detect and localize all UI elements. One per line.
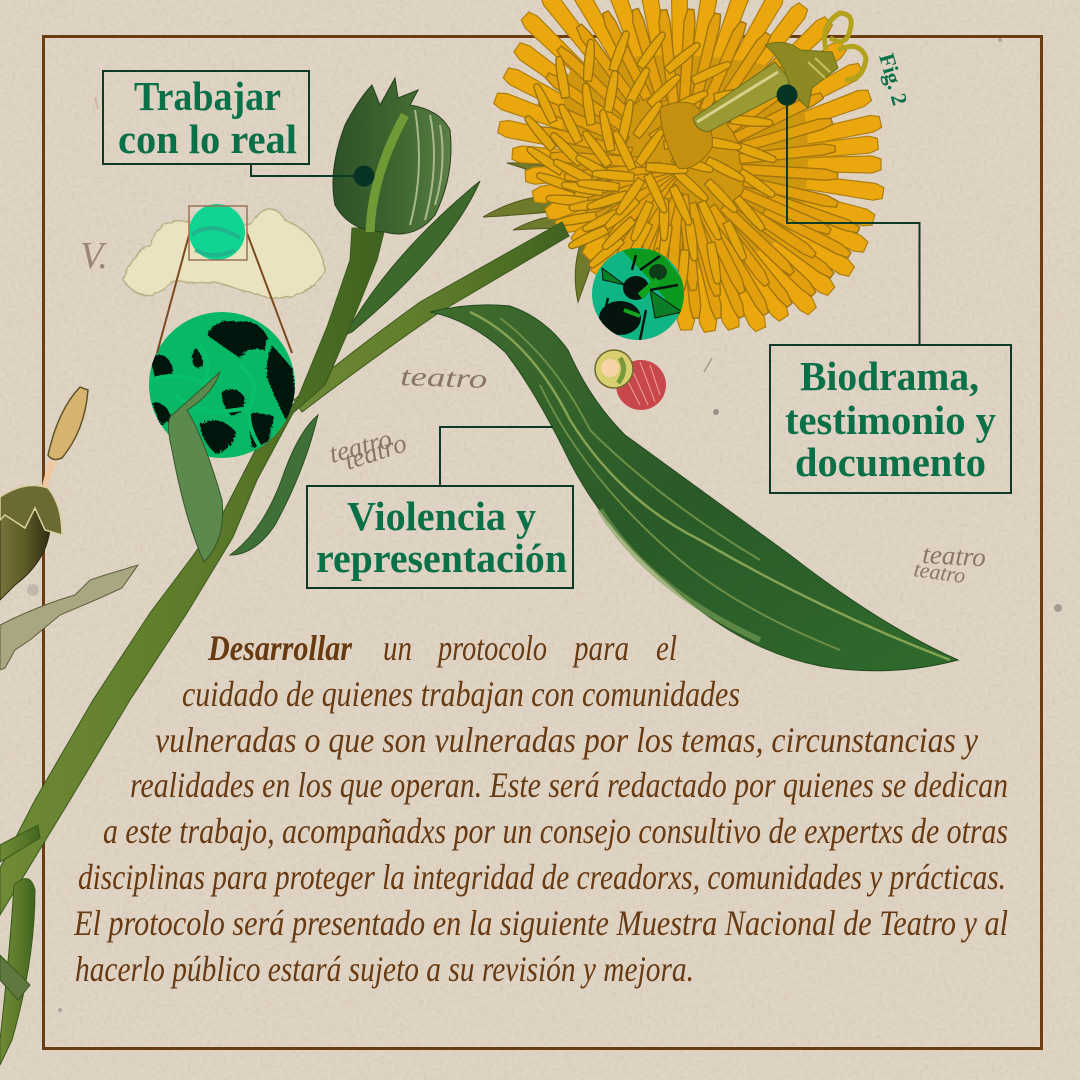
coral specimen bbox=[123, 204, 325, 353]
flower sepals bbox=[483, 163, 598, 302]
red and yellow circles bbox=[595, 350, 666, 410]
left seed head bbox=[0, 387, 138, 670]
body paragraph: vulneradas o que son vulneradas por los temas, circunstancias y bbox=[155, 720, 978, 760]
label: Trabajar con lo real: con lo real bbox=[118, 116, 297, 162]
teatro watermark right: teatro bbox=[922, 539, 987, 572]
body paragraph bbox=[73, 628, 1008, 989]
body paragraph: hacerlo público estará sujeto a su revisión y mejora. bbox=[75, 949, 694, 989]
seed capsule bbox=[0, 510, 51, 600]
teatro watermark: teatro bbox=[400, 361, 488, 394]
V. mark: V. bbox=[80, 235, 108, 277]
label: Biodrama, testimonio y documento: documento bbox=[795, 439, 986, 485]
body paragraph: cuidado de quienes trabajan con comunidades bbox=[182, 674, 740, 714]
label: Trabajar con lo real bbox=[103, 71, 309, 164]
connector: Violencia bbox=[440, 427, 553, 486]
lower branches bbox=[0, 825, 40, 1065]
slim leaf bbox=[345, 181, 480, 335]
small curled leaf bbox=[168, 372, 223, 562]
figure label: Fig. 2 bbox=[874, 50, 913, 108]
connector: Biodrama bbox=[776, 84, 920, 345]
small leaf right bbox=[230, 415, 318, 555]
teatro watermark double: teatro bbox=[326, 423, 395, 469]
body paragraph: protocolo bbox=[436, 628, 547, 668]
connector: Trabajar con lo real bbox=[251, 164, 374, 186]
label: Violencia y representación bbox=[307, 486, 573, 588]
big leaf bbox=[430, 305, 958, 671]
coral highlighted circle bbox=[189, 204, 247, 260]
label: Biodrama, testimonio y documento bbox=[770, 345, 1011, 493]
teatro watermark double: teatro bbox=[341, 428, 410, 476]
flower backing bbox=[562, 55, 808, 270]
label: Violencia y representación: representación bbox=[316, 535, 567, 581]
serrated leaf bbox=[0, 565, 138, 670]
teatro watermark right: teatro bbox=[912, 556, 967, 588]
bud bbox=[333, 78, 451, 234]
body paragraph: Desarrollar bbox=[207, 628, 353, 668]
label: Biodrama, testimonio y documento: Biodrama, bbox=[800, 353, 979, 399]
body paragraph: el bbox=[656, 628, 677, 668]
body paragraph: para bbox=[572, 628, 629, 668]
body paragraph: un bbox=[383, 628, 412, 668]
zoom lines bbox=[157, 233, 292, 353]
label: Violencia y representación: Violencia y bbox=[347, 493, 536, 539]
magnified coral circle bbox=[149, 312, 298, 458]
label: Trabajar con lo real: Trabajar bbox=[134, 73, 281, 119]
flower corolla cup bbox=[660, 102, 712, 169]
stamen bbox=[42, 387, 88, 487]
bee circle bbox=[592, 248, 690, 340]
flower bbox=[483, 0, 884, 333]
inner swirl florets bbox=[522, 29, 778, 292]
teatro watermark right bbox=[912, 539, 987, 588]
outer petals bbox=[493, 0, 884, 333]
branch to flower bbox=[294, 222, 569, 412]
middle petals bbox=[537, 8, 839, 297]
floret tube and stigma bbox=[693, 13, 866, 132]
long strands lower right bbox=[631, 192, 861, 320]
main stem bbox=[0, 228, 385, 915]
label: Biodrama, testimonio y documento: testimonio y bbox=[785, 397, 996, 443]
